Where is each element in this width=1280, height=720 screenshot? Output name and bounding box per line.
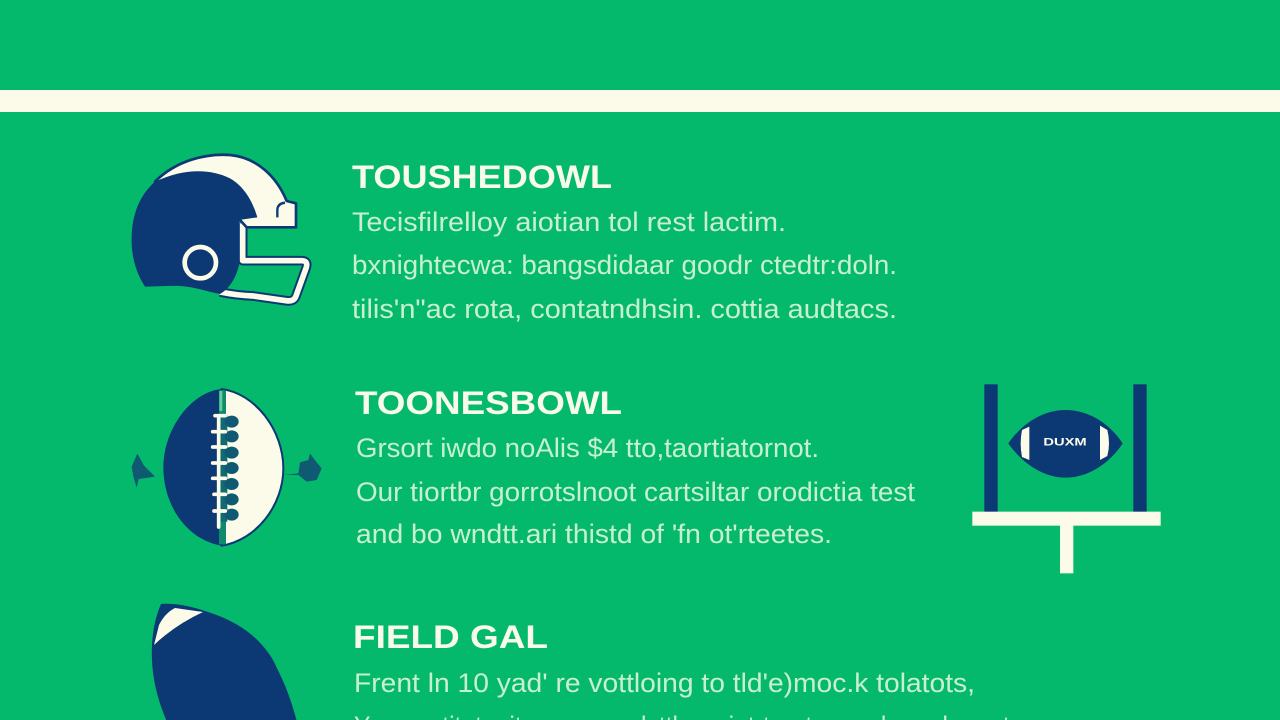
heading: field goal: FIELD GAL [353,619,548,655]
right tuft mark [284,453,322,482]
left spike mark [132,454,155,488]
ball stripes [1021,427,1029,460]
ball body [152,604,297,720]
shell [155,155,296,227]
body text: second section: Our tiortbr gorrotslnoot cartsiltar orodictia test [356,477,916,507]
icon: football cropped at page edge [152,604,297,720]
body text: touchdown [352,207,897,324]
body text: field goal: Frent ln 10 yad' re vottloing to tld'e)moc.k tolatots, [354,668,975,698]
center seam [219,390,226,544]
icon: football helmet [132,155,307,301]
icon: goal post with football [972,384,1161,573]
right upright [1133,384,1147,512]
heading: touchdown: TOUSHEDOWL [352,159,612,195]
visor clip [277,203,285,217]
facemask fill [220,223,307,301]
left upright [984,384,998,512]
body text: touchdown: tilis'n"ac rota, contatndhsin. cottia audtacs. [352,294,897,324]
panel: touchdown section [132,155,897,324]
laces [225,416,239,521]
lace band [220,415,227,522]
lace stitches [213,416,225,527]
panel: second section [132,384,1161,573]
ball stripe [154,608,203,645]
body text: second section: and bo wndtt.ari thistd of 'fn ot'rteetes. [356,519,832,549]
facemask outline [220,223,307,301]
post stem [1060,525,1073,573]
ear hole [185,247,216,278]
ball label: DUXM [1043,437,1087,449]
football [1008,410,1123,478]
ball right half [222,389,283,546]
body text: touchdown: Tecisfilrelloy aiotian tol rest lactim. [352,207,786,237]
heading: second section: TOONESBOWL [355,385,622,421]
icon: football with laces [132,389,322,546]
crossbar [972,512,1161,526]
yard line stripe [0,90,1280,112]
body text: second section: Grsort iwdo noAlis $4 tto,taortiatornot. [356,433,819,463]
body text: field goal [354,668,1022,720]
ball left half [163,389,222,546]
panel: field goal section [152,604,1022,720]
body text: second section [356,433,916,549]
helmet dome [132,171,257,294]
body text: touchdown: bxnightecwa: bangsdidaar goodr ctedtr:doln. [352,250,897,280]
